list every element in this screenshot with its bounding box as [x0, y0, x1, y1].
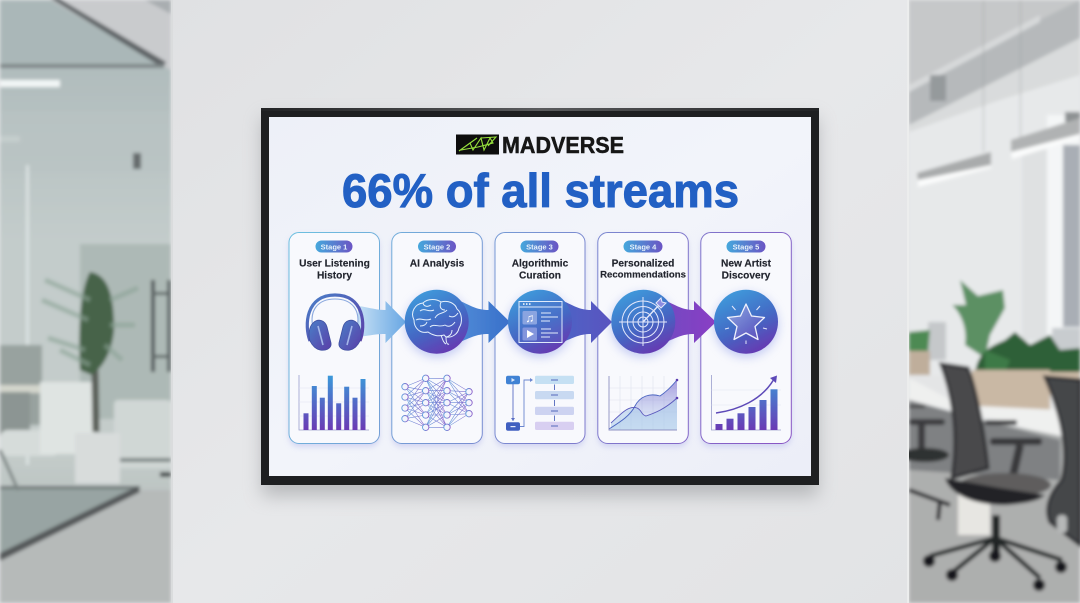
icon: brain circle	[405, 290, 469, 354]
right chair	[1045, 377, 1080, 545]
bar chart: listening history	[299, 375, 369, 430]
poster content	[269, 117, 811, 476]
stage 2 badge: Stage 2	[424, 242, 450, 252]
left office glass partition background	[0, 0, 171, 603]
stage 1 heading: History	[317, 270, 352, 282]
desk and floor	[909, 375, 949, 405]
stage 5 heading: Discovery	[722, 270, 771, 282]
stage 4 badge: Stage 4	[630, 242, 657, 252]
icon glows	[405, 293, 778, 357]
card glows	[289, 236, 791, 447]
arrow: stage 4 to stage 5	[666, 301, 716, 343]
panel: stage 3 card	[495, 232, 585, 444]
white wall	[171, 0, 909, 603]
line chart	[609, 376, 678, 430]
stage 3 badge	[520, 240, 558, 252]
growth bar chart with arrow	[712, 375, 781, 430]
stage 4 heading	[600, 258, 686, 280]
neural network diagram	[402, 375, 472, 430]
logo: Madverse	[456, 132, 624, 158]
pendant lights	[917, 152, 991, 180]
stage 1 badge: Stage 1	[321, 242, 347, 252]
poster frame	[261, 108, 819, 485]
main chair	[941, 364, 988, 478]
right office background with lights, plants and chairs	[901, 0, 1080, 603]
stage 5 badge: Stage 5	[733, 242, 759, 252]
panel: stage 2 card	[392, 232, 482, 444]
logo: Madverse: MADVERSE	[502, 132, 624, 158]
icon: headphones	[307, 295, 363, 350]
arrow: stage 3 to stage 4	[563, 301, 612, 343]
small far chair	[909, 405, 925, 408]
stage 3 heading: Algorithmic	[512, 258, 569, 270]
arrow: stage 1 to stage 2	[358, 301, 406, 343]
monitors and plants	[928, 322, 946, 360]
plant left	[42, 272, 138, 432]
panel: stage 1 card	[289, 232, 380, 444]
stage 3 heading: Curation	[519, 270, 561, 282]
stage 5 heading: New Artist	[721, 258, 772, 270]
stage 5 badge	[726, 240, 766, 252]
stage 4 badge	[624, 240, 662, 252]
stage 4 heading: Personalized	[612, 258, 674, 270]
poster panel	[269, 117, 811, 476]
icon: app window circle	[508, 290, 572, 354]
stage 1 heading: User Listening	[299, 258, 370, 270]
flow diagram	[506, 376, 574, 431]
panel: stage 4 card	[598, 232, 688, 444]
icon: app window circle: ♫	[525, 311, 534, 325]
stage 1 badge	[316, 240, 352, 252]
stage 3 badge: Stage 3	[526, 242, 553, 252]
arrow: stage 2 to stage 3	[460, 301, 510, 343]
icon: target circle	[611, 290, 675, 354]
stage 4 heading: Recommendations	[600, 270, 686, 280]
panel: stage 5 card	[701, 232, 791, 444]
icon: star circle	[714, 290, 778, 354]
title: 66% of all streams	[342, 164, 739, 217]
stage 2 badge	[418, 240, 456, 252]
frame drop shadow	[262, 118, 818, 496]
stage 2 heading: AI Analysis	[410, 258, 465, 270]
